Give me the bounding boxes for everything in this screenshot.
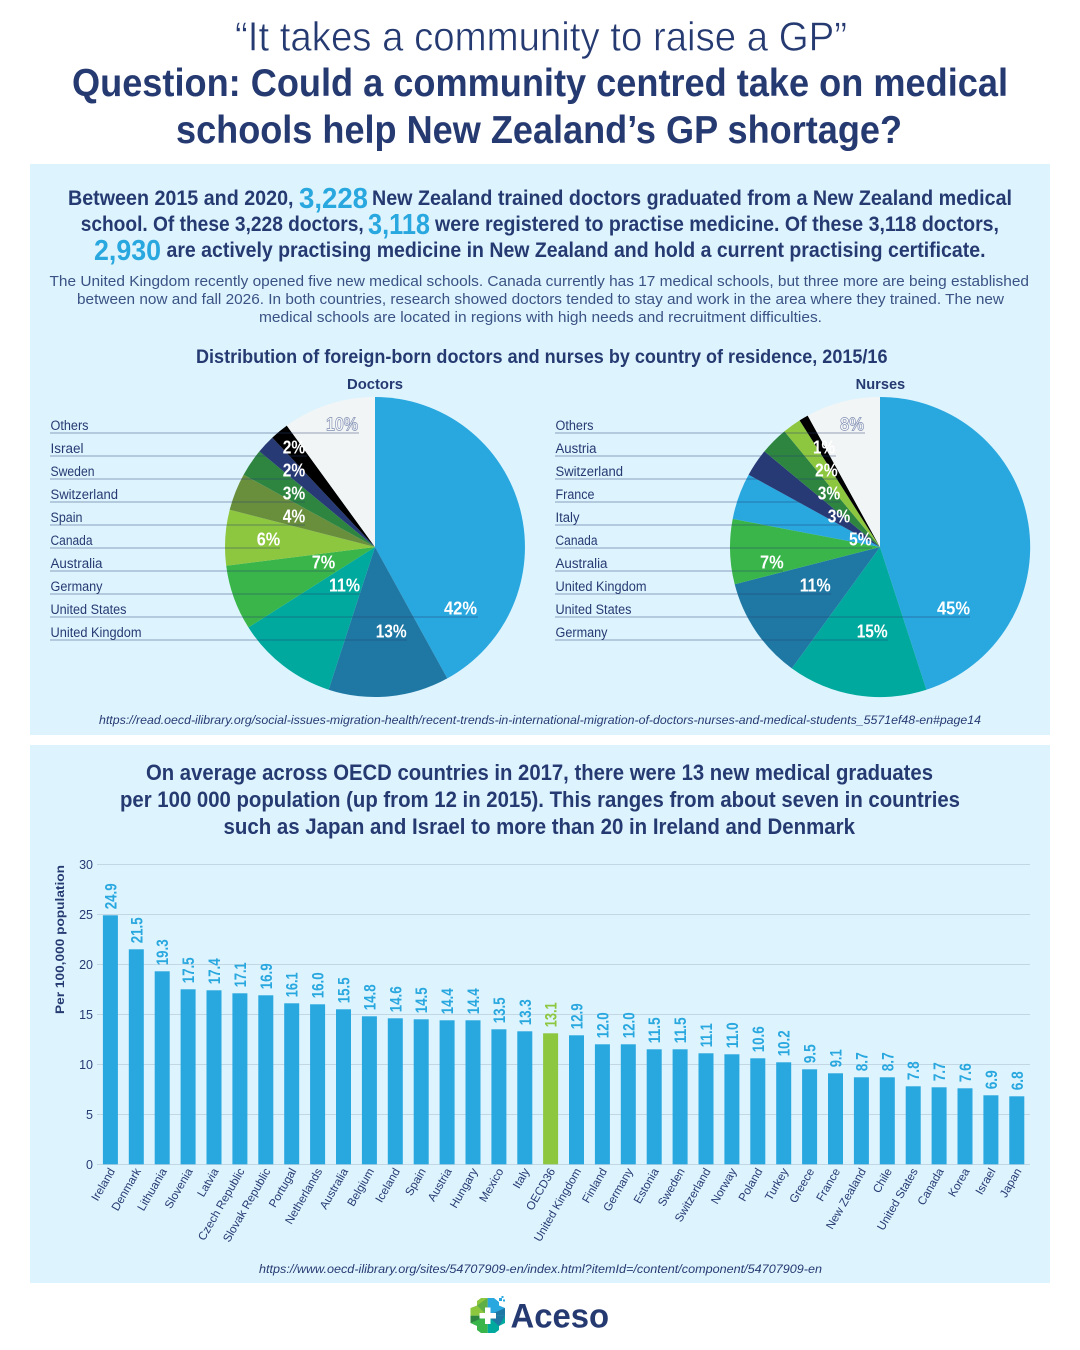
nurses percentage labels: 3% [828,506,850,526]
doctors percentage labels: 10% [326,414,358,434]
doctors legend labels: Switzerland [50,487,118,502]
title question line 2: schools help New Zealand’s GP shortage? [176,109,902,152]
y axis gridlines and tick labels: 20 [79,958,93,972]
nurses legend labels [556,418,646,640]
y axis gridlines and tick labels [79,858,1030,1172]
bar: United Kingdom: 12.9 [568,1003,586,1029]
y axis gridlines and tick labels: 5 [86,1108,93,1122]
supporting paragraph: medical schools are located in regions with high needs and recruitment difficulties. [259,310,822,326]
bar: Iceland [373,986,405,1205]
doctors legend labels: Israel [50,441,84,456]
doctors percentage labels [257,414,477,642]
bar: Latvia: Latvia [195,1166,222,1199]
doctors legend labels [50,418,142,640]
bar: Japan [997,1071,1027,1200]
bar: OECD36 average [524,1002,561,1213]
bar: Ireland: 24.9 [102,883,120,909]
bar: United States: United States [875,1166,921,1233]
bar: Slovak Republic: 16.9 [258,963,276,989]
bar: Estonia [631,1017,664,1206]
bar: Estonia: Estonia [631,1166,662,1206]
bar: Netherlands [283,972,328,1227]
nurses percentage labels [760,414,970,642]
doctors chart heading: Doctors [347,377,403,393]
bar: Mexico [477,997,509,1204]
bar: Finland: Finland [580,1166,610,1205]
doctors legend labels: Germany [50,579,103,594]
nurses pie slices [730,397,1030,697]
doctors percentage labels: 7% [312,552,335,572]
bar: Sweden: 11.5 [672,1017,690,1043]
doctors legend labels: United Kingdom [50,625,142,640]
graduates heading: such as Japan and Israel to more than 20 in Ireland and Denmark [224,814,855,839]
bar: Ireland: Ireland [89,1166,118,1203]
nurses percentage labels: 2% [815,460,838,480]
bar: Slovak Republic: Slovak Republic [221,1166,273,1245]
y axis gridlines and tick labels: 10 [79,1058,93,1072]
nurses legend labels: Others [556,418,594,433]
bar: France [814,1049,846,1204]
bar: Slovenia: 17.5 [180,957,198,983]
bar: Chile [870,1052,897,1195]
bar: Turkey: Turkey [763,1166,791,1203]
bar: France: France [814,1166,843,1204]
title question line 1: Question: Could a community centred take on medical [72,62,1008,105]
bar: United Kingdom: United Kingdom [532,1166,584,1244]
doctors percentage labels: 13% [376,620,407,642]
panel: doctor statistics and pie charts [30,164,1050,735]
pie section heading: Distribution of foreign-born doctors and nurses by country of residence, 2015/16 [196,347,888,368]
doctors legend labels: Others [50,418,89,433]
bar: Australia: 15.5 [336,977,354,1003]
nurses legend labels: Australia [556,556,608,571]
doctors percentage labels: 11% [329,574,360,596]
bar: Greece [787,1044,820,1205]
bar: Hungary [447,988,483,1210]
bar: Norway: 11.0 [724,1022,742,1048]
bar: Lithuania: 19.3 [154,939,172,965]
bar: Greece: Greece [787,1166,817,1205]
doctors percentage labels: 42% [444,598,477,618]
nurses chart heading: Nurses [856,377,905,393]
nurses percentage labels: 1% [813,436,835,458]
y axis title: Per 100,000 population [53,865,67,1014]
bar: Turkey: 10.2 [776,1030,794,1056]
nurses legend labels: Germany [556,625,608,640]
doctors percentage labels: 6% [257,528,280,550]
bar: Germany [601,1012,638,1214]
bar: Canada: 7.7 [931,1062,949,1081]
bar: Austria [425,988,457,1204]
intro paragraph with highlighted numbers: 2,930 [94,235,161,267]
graduates heading [120,760,960,839]
doctors legend labels: United States [50,602,127,617]
bar: Belgium: 14.8 [361,984,379,1010]
logo: Aceso [470,1296,609,1336]
bar: United States [875,1061,923,1233]
bar: Latvia: 17.4 [206,958,224,984]
bar: Spain: 14.5 [413,987,431,1013]
bar: France: 9.1 [828,1049,846,1067]
bar: New Zealand [824,1052,871,1232]
bar: Poland: 10.6 [750,1026,768,1052]
bar: Italy: Italy [511,1166,532,1191]
bar: Mexico: Mexico [477,1166,506,1204]
graduates heading: On average across OECD countries in 2017, there were 13 new medical graduates [146,760,933,785]
bar: Hungary: 14.4 [465,988,483,1014]
nurses legend labels: France [556,487,594,502]
doctors percentage labels: 2% [283,460,305,480]
nurses legend labels: Italy [556,510,580,525]
supporting paragraph [50,274,1029,326]
icon: medical cross [470,1296,505,1333]
title quote: “It takes a community to raise a GP” [235,14,847,60]
nurses legend labels: United Kingdom [556,579,646,594]
intro paragraph with highlighted numbers: school. Of these 3,228 doctors, [81,212,364,236]
bar: Portugal [266,972,302,1210]
bar: Portugal: Portugal [266,1166,299,1210]
bar: Spain: Spain [403,1166,429,1198]
bar: Iceland: Iceland [373,1166,403,1205]
doctors legend labels: Australia [50,556,103,571]
bar: Sweden: Sweden [655,1166,688,1209]
bar: Denmark: Denmark [109,1166,144,1213]
nurses percentage labels: 7% [760,552,784,572]
bar: Belgium [345,984,379,1209]
doctors pie slices [225,397,525,697]
y axis gridlines and tick labels: 15 [79,1008,93,1022]
bar: Chile: Chile [870,1166,895,1195]
bar: Korea: 7.6 [957,1063,975,1082]
bar: Israel: 6.9 [983,1070,1001,1089]
bar: Poland [736,1026,768,1204]
nurses percentage labels: 3% [818,482,840,504]
bar: New Zealand: 8.7 [853,1052,871,1071]
intro paragraph with highlighted numbers: 3,228 [299,183,368,215]
nurses percentage labels: 15% [857,620,888,642]
bar: Slovenia [162,957,198,1211]
bar: Finland [580,1012,612,1205]
nurses legend labels: Switzerland [556,464,623,479]
panel: new medical graduates [30,745,1050,1283]
bar: Greece: 9.5 [802,1044,820,1063]
intro paragraph with highlighted numbers: 3,118 [368,209,430,241]
bar: Japan: 6.8 [1009,1071,1027,1090]
bar: Israel [973,1070,1001,1197]
bar: Italy: 13.3 [517,999,535,1025]
nurses percentage labels: 5% [849,528,872,550]
bar: Latvia [195,958,224,1199]
bar: Belgium: Belgium [345,1166,377,1209]
y axis gridlines and tick labels: 0 [86,1158,93,1172]
bar: Portugal: 16.1 [284,972,302,997]
bar: OECD36 average: OECD36 [524,1166,558,1213]
supporting paragraph: between now and fall 2026. In both countries, research showed doctors tended to stay and work in the area where they trained. The new [77,292,1005,308]
bar: Czech Republic: 17.1 [232,962,250,987]
bar: Netherlands: 16.0 [310,972,328,998]
source link for pie charts: https://read.oecd-ilibrary.org/social-issues-migration-health/recent-trends-in-international-migration-of-doctors-nurses-and-medical-students_5571ef48-en#page14 [99,715,981,727]
bar: Mexico: 13.5 [491,997,509,1023]
doctors percentage labels: 3% [283,482,305,504]
bar: Canada: Canada [915,1166,947,1208]
bar: Korea [946,1063,975,1199]
source link for bar chart: https://www.oecd-ilibrary.org/sites/54707909-en/index.html?itemId=/content/component/54707909-en [259,1264,822,1276]
bar: Iceland: 14.6 [387,986,405,1012]
bar: Estonia: 11.5 [646,1017,664,1043]
bar: Australia [317,977,354,1212]
graduates heading: per 100 000 population (up from 12 in 2015). This ranges from about seven in countries [120,787,960,812]
bar: Switzerland: 11.1 [698,1023,716,1047]
bar: Sweden [655,1017,690,1209]
nurses legend labels: Canada [556,533,598,548]
bar: Czech Republic: Czech Republic [196,1166,248,1243]
bar: Turkey [763,1030,794,1203]
bar: Finland: 12.0 [594,1012,612,1038]
bar: Norway [709,1022,742,1207]
intro paragraph with highlighted numbers: Between 2015 and 2020, [68,186,294,210]
doctors legend labels: Canada [50,533,93,548]
doctors percentage labels: 4% [283,506,305,526]
bar: Denmark: 21.5 [128,917,146,943]
bar: Slovak Republic [221,963,276,1245]
bar: United Kingdom [532,1003,586,1244]
bar: Lithuania: Lithuania [135,1166,170,1213]
bar: Canada [915,1062,949,1208]
bar: Korea: Korea [946,1166,973,1199]
nurses legend leader lines [555,433,970,640]
nurses percentage labels: 45% [937,598,970,618]
bar: Hungary: Hungary [447,1166,481,1210]
bar: Switzerland: Switzerland [672,1166,714,1224]
title block [72,14,1008,152]
bar: Lithuania [135,939,172,1213]
bar: United States: 7.8 [905,1061,923,1080]
bar: Switzerland [672,1023,716,1224]
bar: Germany: 12.0 [620,1012,638,1038]
bar: Germany: Germany [601,1166,636,1214]
bar: Netherlands: Netherlands [283,1166,325,1227]
nurses legend labels: United States [556,602,632,617]
y axis gridlines and tick labels: 25 [79,908,93,922]
doctors legend labels: Spain [50,510,82,525]
intro paragraph with highlighted numbers: were registered to practise medicine. Of these 3,118 doctors, [434,212,999,236]
bar: Poland: Poland [736,1166,765,1204]
intro paragraph with highlighted numbers [68,183,1012,267]
wordmark: Aceso [510,1298,609,1336]
intro paragraph with highlighted numbers: are actively practising medicine in New Zealand and hold a current practising certificate. [166,238,986,262]
bar: Austria: 14.4 [439,988,457,1014]
nurses percentage labels: 8% [840,414,864,434]
bar: Israel: Israel [973,1166,998,1197]
bar: New Zealand: New Zealand [824,1166,869,1232]
doctors legend labels: Sweden [50,464,94,479]
bar chart: graduates per 100,000 population [53,858,1030,1245]
bar: Japan: Japan [997,1166,1024,1200]
bar: Ireland [89,883,120,1203]
bar: Denmark [109,917,146,1213]
y axis gridlines and tick labels: 30 [79,858,93,872]
chart: doctors pie [50,377,525,697]
chart: nurses pie [555,377,1030,697]
bar: Chile: 8.7 [879,1052,897,1071]
nurses legend labels: Austria [556,441,597,456]
bar: Austria: Austria [425,1166,455,1204]
supporting paragraph: The United Kingdom recently opened five new medical schools. Canada currently has 17 medical schools, but three more are being established [50,274,1029,290]
nurses percentage labels: 11% [800,574,831,596]
bar: OECD36 average: 13.1 [543,1002,561,1027]
bar: Australia: Australia [317,1166,351,1212]
bar: Slovenia: Slovenia [162,1166,196,1211]
bar: Italy [511,999,535,1191]
doctors legend leader lines [50,433,478,640]
bar: Czech Republic [196,962,250,1243]
bar: Norway: Norway [709,1166,740,1207]
bar: Spain [403,987,431,1198]
doctors percentage labels: 2% [283,436,305,458]
intro paragraph with highlighted numbers: New Zealand trained doctors graduated from a New Zealand medical [372,186,1012,210]
